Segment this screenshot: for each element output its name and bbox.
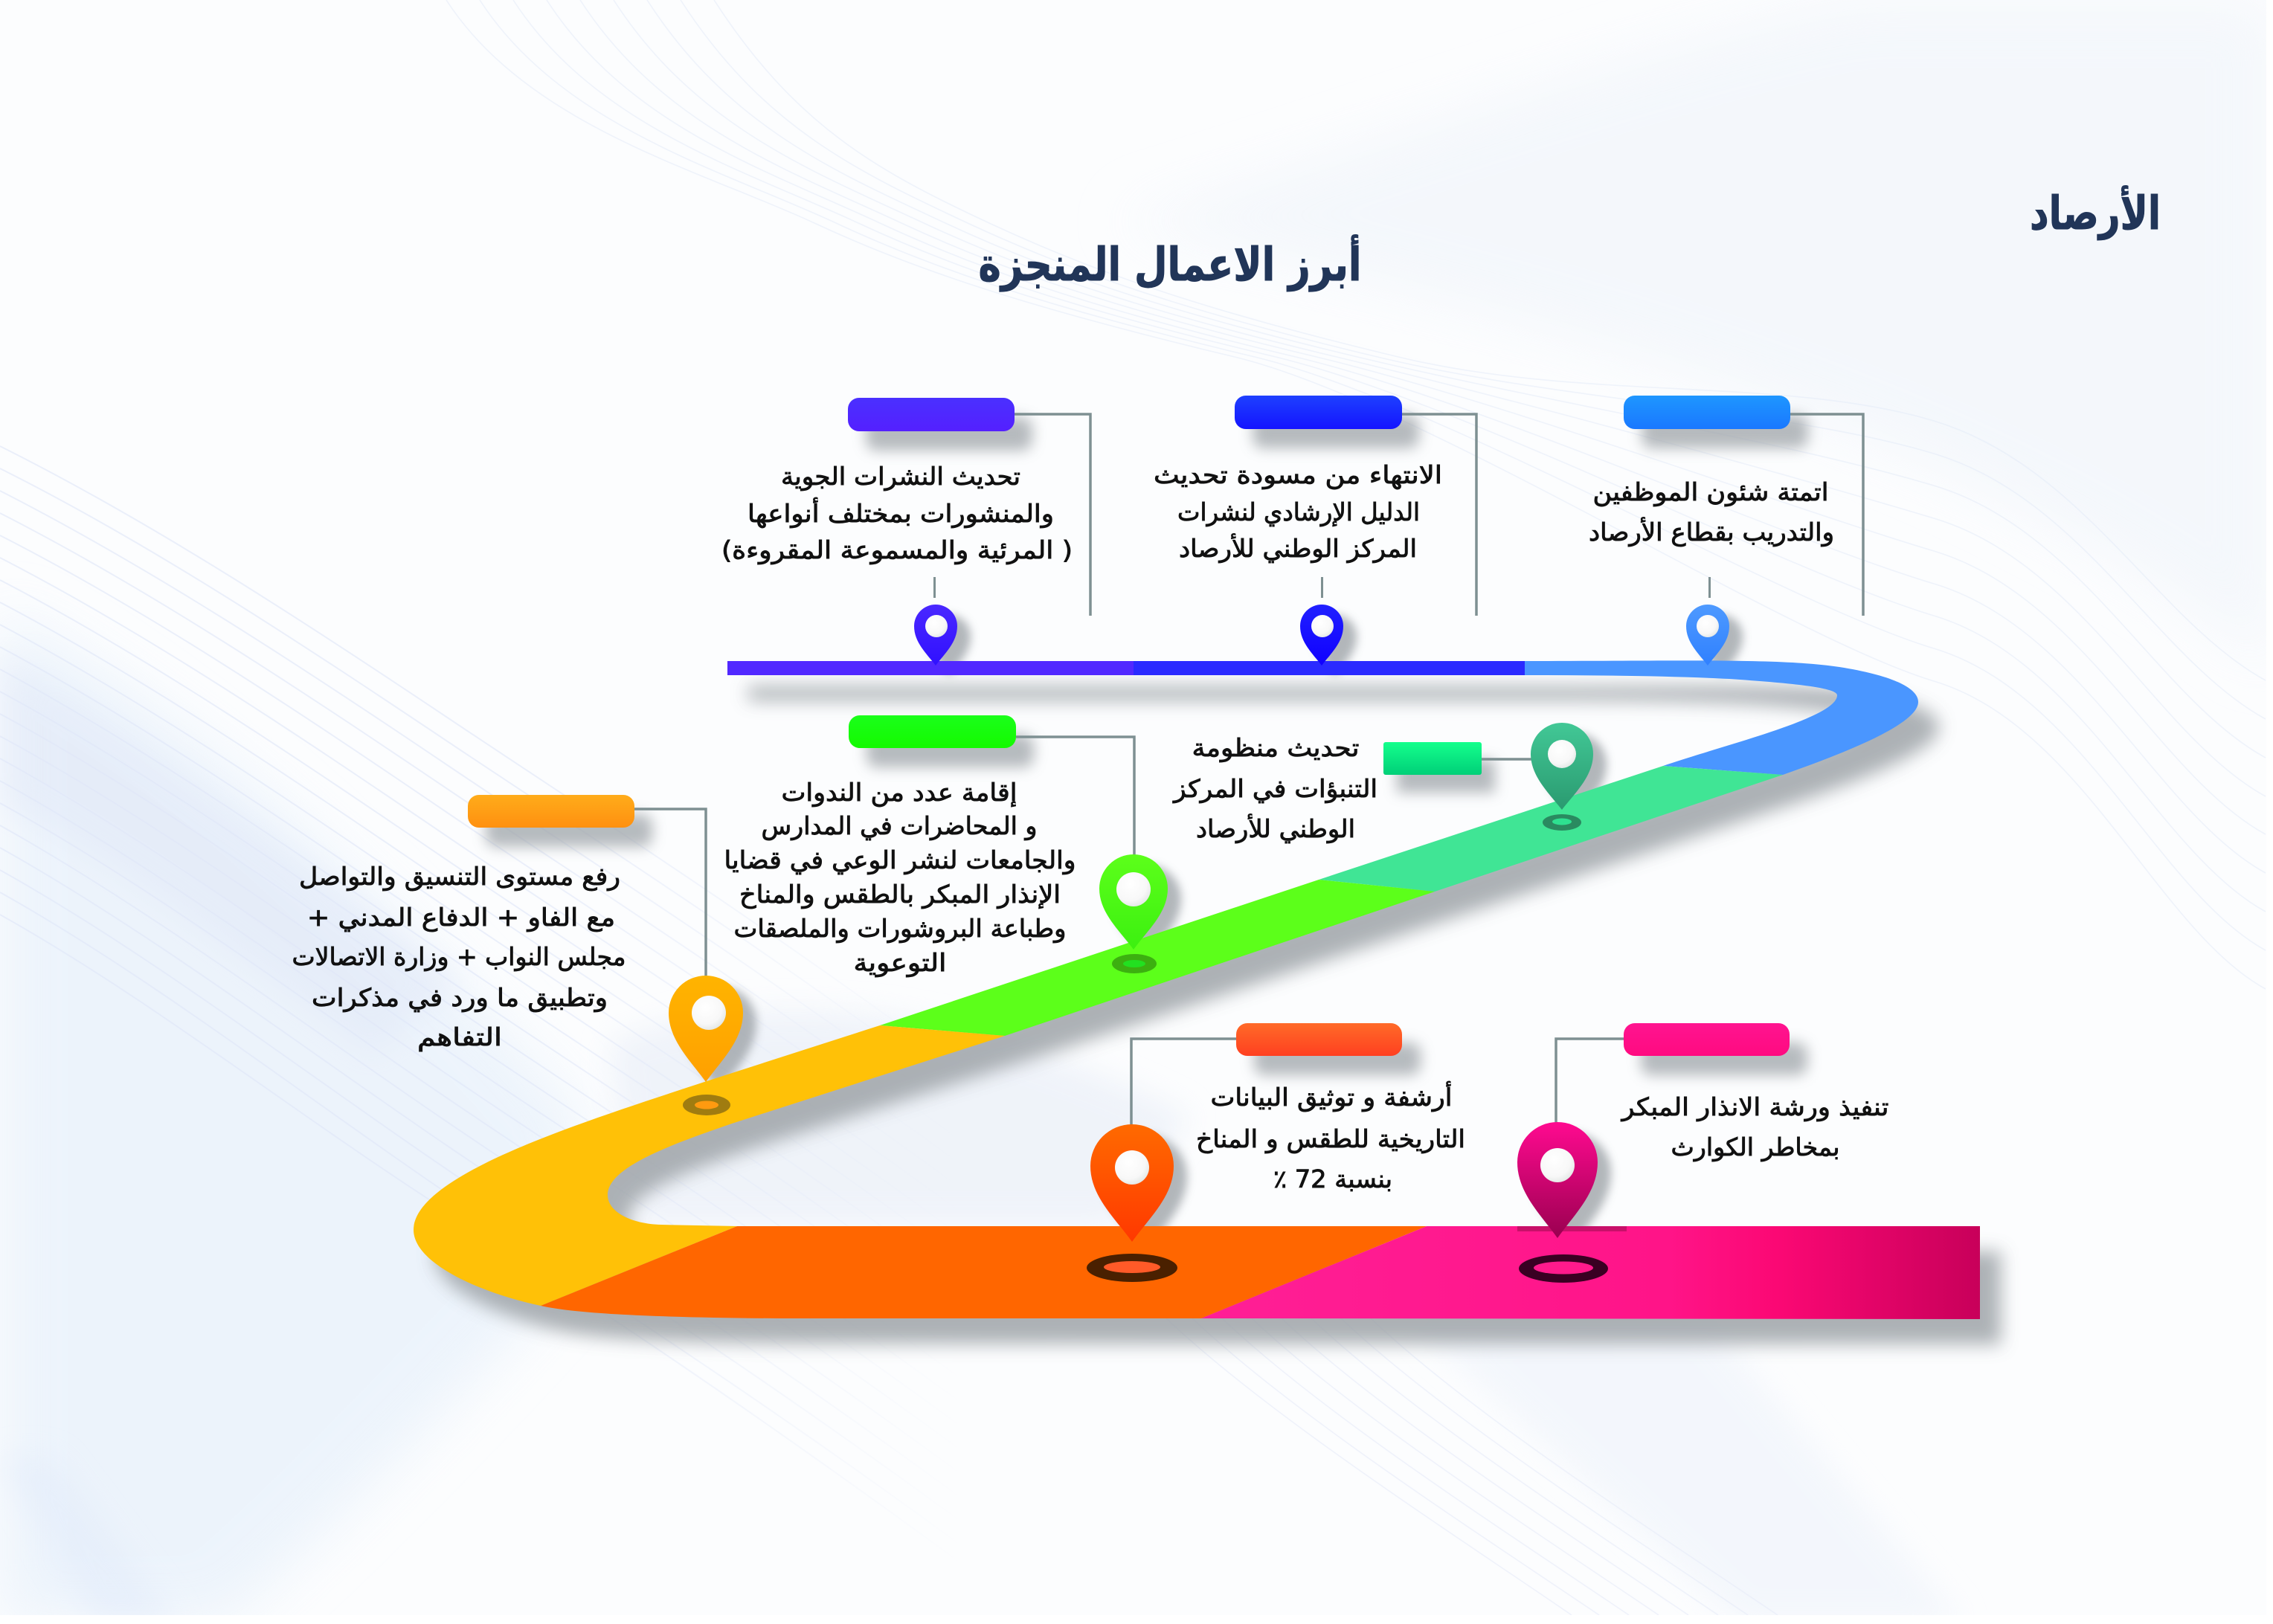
text block: بنسبة 72 ٪ (1273, 1164, 1392, 1193)
panel: milestone light blue (HR automation) (1589, 396, 1863, 666)
tag (1624, 1023, 1790, 1056)
text block: مع الفاو + الدفاع المدني + (307, 903, 615, 932)
text block (1196, 1081, 1465, 1193)
road mark under pin (1517, 1226, 1627, 1231)
road segment: teal (1319, 766, 1783, 892)
text block: ( المرئية والمسموعة المقروءة) (721, 535, 1073, 564)
text block: الإنذار المبكر بالطقس والمناخ (739, 880, 1061, 909)
tag shadow (1253, 415, 1419, 448)
text block (721, 462, 1073, 564)
text block: التوعوية (854, 948, 946, 977)
road: coloured winding timeline (414, 660, 2001, 1344)
pin (1099, 854, 1168, 950)
panel: milestone green (seminars) (724, 715, 1168, 977)
pin hole (692, 996, 726, 1030)
tag (1235, 396, 1402, 429)
text block: تحديث النشرات الجوية (781, 462, 1020, 491)
connector (1131, 1039, 1236, 1129)
text block: المركز الوطني للأرصاد (1179, 533, 1417, 563)
pin hole (1115, 1150, 1149, 1185)
pin hole (1311, 615, 1334, 637)
panel: milestone purple (bulletins) (721, 398, 1090, 666)
tick (933, 577, 936, 598)
heading: meteorology sector name: الأرصاد (2030, 185, 2161, 240)
connector (1016, 737, 1134, 859)
pin hole (1540, 1148, 1575, 1182)
title: highlights of completed work: أبرز الاعمال المنجزة (979, 234, 1361, 291)
ring on road (1543, 814, 1581, 831)
text block: التاريخية للطقس و المناخ (1196, 1124, 1465, 1153)
text block: والمنشورات بمختلف أنواعها (748, 497, 1054, 528)
pin (1531, 723, 1593, 810)
road segment: pink (1201, 1226, 1980, 1319)
pin hole (1697, 615, 1719, 637)
ring on road (1519, 1254, 1608, 1283)
pin hole (1116, 872, 1151, 906)
text block: وتطبيق ما ورد في مذكرات (312, 983, 608, 1013)
tag (1624, 396, 1790, 429)
text block: اتمتة شئون الموظفين (1593, 477, 1828, 506)
text block: بمخاطر الكوارث (1671, 1132, 1840, 1161)
road segment: light blue curve (1525, 660, 1918, 775)
pin hole (1548, 740, 1576, 768)
road shadow (434, 686, 2001, 1344)
tag shadow (1397, 760, 1495, 793)
text block: التفاهم (417, 1022, 502, 1051)
text block: أرشفة و توثيق البيانات (1211, 1081, 1452, 1112)
tick (1321, 577, 1323, 598)
text block: الانتهاء من مسودة تحديث (1154, 460, 1442, 489)
panel: milestone blue (guide) (1154, 396, 1476, 666)
tag shadow (1641, 1043, 1807, 1075)
ring on road (683, 1095, 730, 1115)
text block: تنفيذ ورشة الانذار المبكر (1620, 1092, 1889, 1121)
tag (1383, 742, 1482, 775)
pin shadows behind the road (682, 615, 1743, 1252)
pin (1686, 605, 1729, 666)
text block: تحديث منظومة (1192, 733, 1360, 762)
tag shadow (867, 735, 1034, 767)
pin (1517, 1122, 1598, 1238)
connector (1015, 414, 1090, 616)
text block (724, 778, 1076, 977)
road segment: green (880, 880, 1435, 1036)
text block (1172, 733, 1377, 843)
text block: الوطني للأرصاد (1196, 813, 1355, 843)
tag shadow (866, 417, 1032, 451)
road segment: orange (541, 1226, 1427, 1318)
connector (1790, 414, 1863, 616)
ring on road (1087, 1254, 1177, 1282)
text block (292, 862, 626, 1051)
tag (849, 715, 1016, 748)
tag (848, 398, 1015, 431)
text block: التنبؤات في المركز (1172, 774, 1377, 803)
pin hole (925, 615, 948, 637)
panel: milestone amber (coordination) (292, 795, 743, 1115)
tag shadow (486, 814, 652, 847)
connector (1402, 414, 1476, 616)
text block (1154, 460, 1442, 563)
panel: milestone teal (forecast system) (1172, 723, 1593, 843)
road segment: purple (727, 661, 1134, 675)
panel: milestone orange (data archiving) (1087, 1023, 1465, 1282)
text block: و المحاضرات في المدارس (762, 811, 1037, 840)
pin (1300, 605, 1343, 666)
road segment: yellow bend (414, 1025, 1005, 1306)
connector (634, 809, 706, 980)
text block: وطباعة البروشورات والملصقات (733, 914, 1067, 943)
connector (1482, 758, 1532, 761)
text block: والجامعات لنشر الوعي في قضايا (724, 845, 1076, 874)
tag shadow (1642, 415, 1808, 448)
ring on road (1112, 954, 1157, 973)
pin (669, 976, 743, 1082)
connector (1556, 1039, 1624, 1127)
pin (1090, 1124, 1174, 1242)
text block: مجلس النواب + وزارة الاتصالات (292, 942, 626, 971)
text block (1620, 1092, 1889, 1161)
text block: إقامة عدد من الندوات (781, 778, 1017, 808)
road segment: blue (1134, 661, 1525, 675)
text block: الدليل الإرشادي لنشرات (1177, 497, 1420, 526)
text block (1589, 477, 1834, 547)
tag shadow (1254, 1043, 1421, 1075)
text block: والتدريب بقطاع الأرصاد (1589, 517, 1834, 547)
text block: رفع مستوى التنسيق والتواصل (299, 862, 620, 892)
panel: milestone pink (early warning workshop) (1517, 1023, 1889, 1283)
tick (1708, 577, 1711, 598)
pin (914, 605, 957, 666)
tag (468, 795, 634, 828)
tag (1236, 1023, 1402, 1056)
